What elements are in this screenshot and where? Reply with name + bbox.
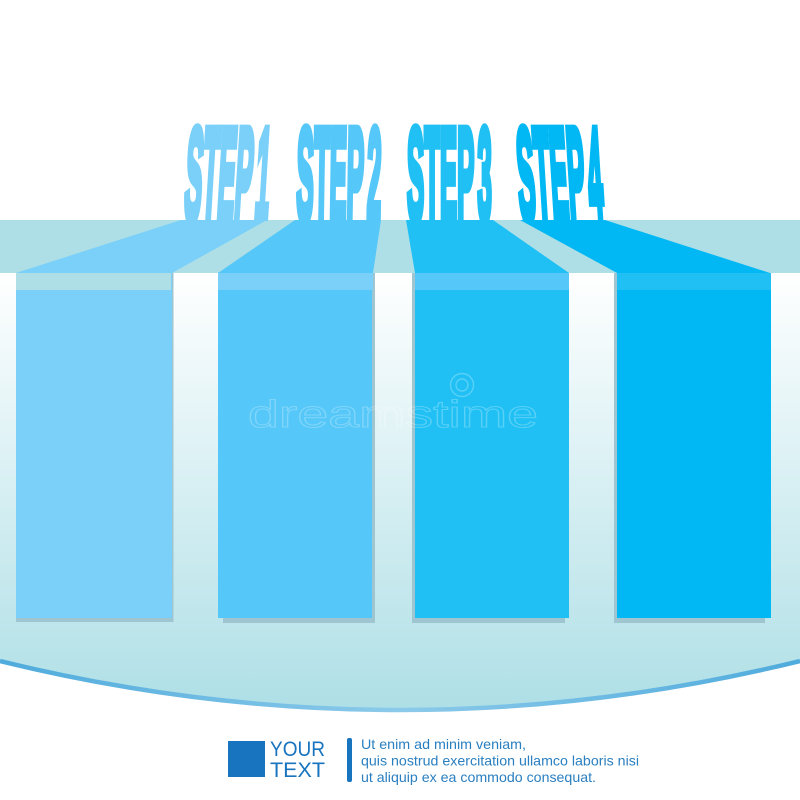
step 2 panel xyxy=(218,273,372,618)
heading: step 2: STEP 2 xyxy=(296,103,383,249)
footer logo xyxy=(228,737,325,782)
step 2 column xyxy=(218,103,383,623)
step 4 panel top strip xyxy=(617,273,771,290)
horizontal band xyxy=(0,220,800,273)
heading: step 1: STEP 1 xyxy=(181,102,275,249)
footer divider bar xyxy=(347,738,352,782)
logo text: YOUR xyxy=(270,737,325,761)
logo square xyxy=(228,741,265,777)
watermark word: dreamstime xyxy=(248,394,538,436)
step 3 panel top strip xyxy=(415,273,569,290)
step 2 perspective ribbon xyxy=(218,220,381,273)
step 3 panel xyxy=(415,273,569,618)
background gradient with curved bottom edge xyxy=(0,273,800,710)
step 1 panel shadow xyxy=(16,273,174,622)
step 4 perspective ribbon xyxy=(520,220,770,273)
step 2 panel top strip xyxy=(218,273,373,290)
step 4 panel xyxy=(617,273,771,618)
step 3 column xyxy=(406,103,569,623)
heading: step 3: STEP 3 xyxy=(407,103,492,249)
footer paragraph: quis nostrud exercitation ullamco laboris nisi xyxy=(361,752,639,768)
step 1 panel top strip xyxy=(16,273,171,290)
footer paragraph: ut aliquip ex ea commodo consequat. xyxy=(361,769,596,785)
curved bottom line xyxy=(0,661,800,710)
heading: step 4: STEP 4 xyxy=(513,102,607,249)
step 4 column xyxy=(513,102,771,623)
step 4 panel shadow xyxy=(614,273,765,623)
logo text: TEXT xyxy=(270,758,325,782)
step 1 perspective ribbon xyxy=(16,220,267,273)
step 2 panel shadow xyxy=(223,273,375,623)
footer paragraph: Ut enim ad minim veniam, xyxy=(361,736,526,752)
step 3 perspective ribbon xyxy=(406,220,569,273)
step 1 panel xyxy=(16,273,172,618)
step 3 panel shadow xyxy=(412,273,565,623)
step 1 column xyxy=(16,102,275,622)
watermark spiral icon xyxy=(450,374,474,396)
watermark xyxy=(248,374,538,436)
